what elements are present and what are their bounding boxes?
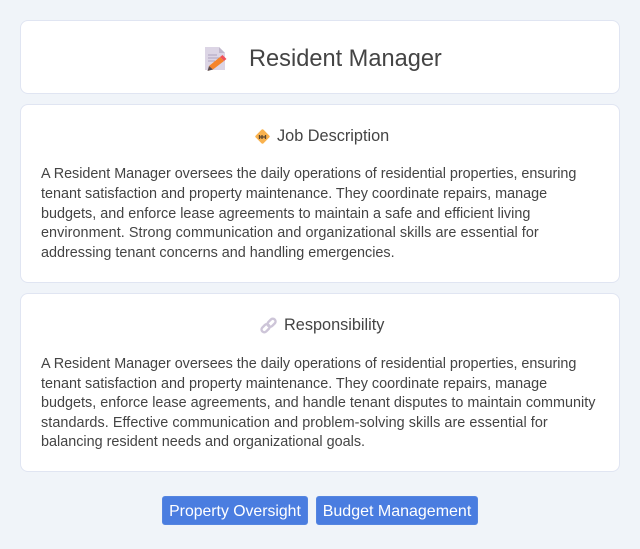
tag: property oversight	[162, 496, 308, 525]
text: job description body: tenant satisfaction and property maintenance. They coordinate repairs, manage	[41, 186, 547, 202]
text: job description body: budgets, and enforce lease agreements to maintain a safe and efficient living	[41, 206, 530, 222]
text: responsibility body	[41, 356, 596, 450]
text: responsibility body: budgets, enforce lease agreements, and handle tenant disputes to maintain community	[41, 395, 595, 411]
text: responsibility body: tenant satisfaction and property maintenance. They coordinate repairs, manage	[41, 376, 547, 392]
tag: budget management	[316, 496, 478, 525]
text: responsibility body: standards. Effective communication and problem-solving skills are essential for	[41, 415, 548, 431]
text: job description body: addressing tenant concerns and handling emergencies.	[41, 245, 395, 261]
text: responsibility body: A Resident Manager oversees the daily operations of residential properties, ensuring	[41, 356, 576, 372]
tag: property oversight: Property Oversight	[169, 503, 301, 520]
heading: responsibility: Responsibility	[284, 316, 384, 334]
icon: construction sign	[255, 129, 270, 144]
panel: job description	[20, 104, 620, 283]
text: job description body: A Resident Manager oversees the daily operations of residential properties, ensuring	[41, 166, 576, 182]
icon: chain link	[260, 318, 277, 334]
text: job description body	[41, 166, 576, 261]
text: job description body: environment. Strong communication and organizational skills are essential for	[41, 225, 539, 241]
title: Resident Manager	[249, 46, 442, 72]
panel: responsibility	[20, 293, 620, 472]
tag: budget management: Budget Management	[323, 503, 471, 520]
panel: title card	[20, 20, 620, 94]
heading: job description: Job Description	[277, 127, 389, 145]
text: responsibility body: balancing resident needs and organizational goals.	[41, 434, 365, 450]
icon: document with pencil	[205, 47, 226, 71]
